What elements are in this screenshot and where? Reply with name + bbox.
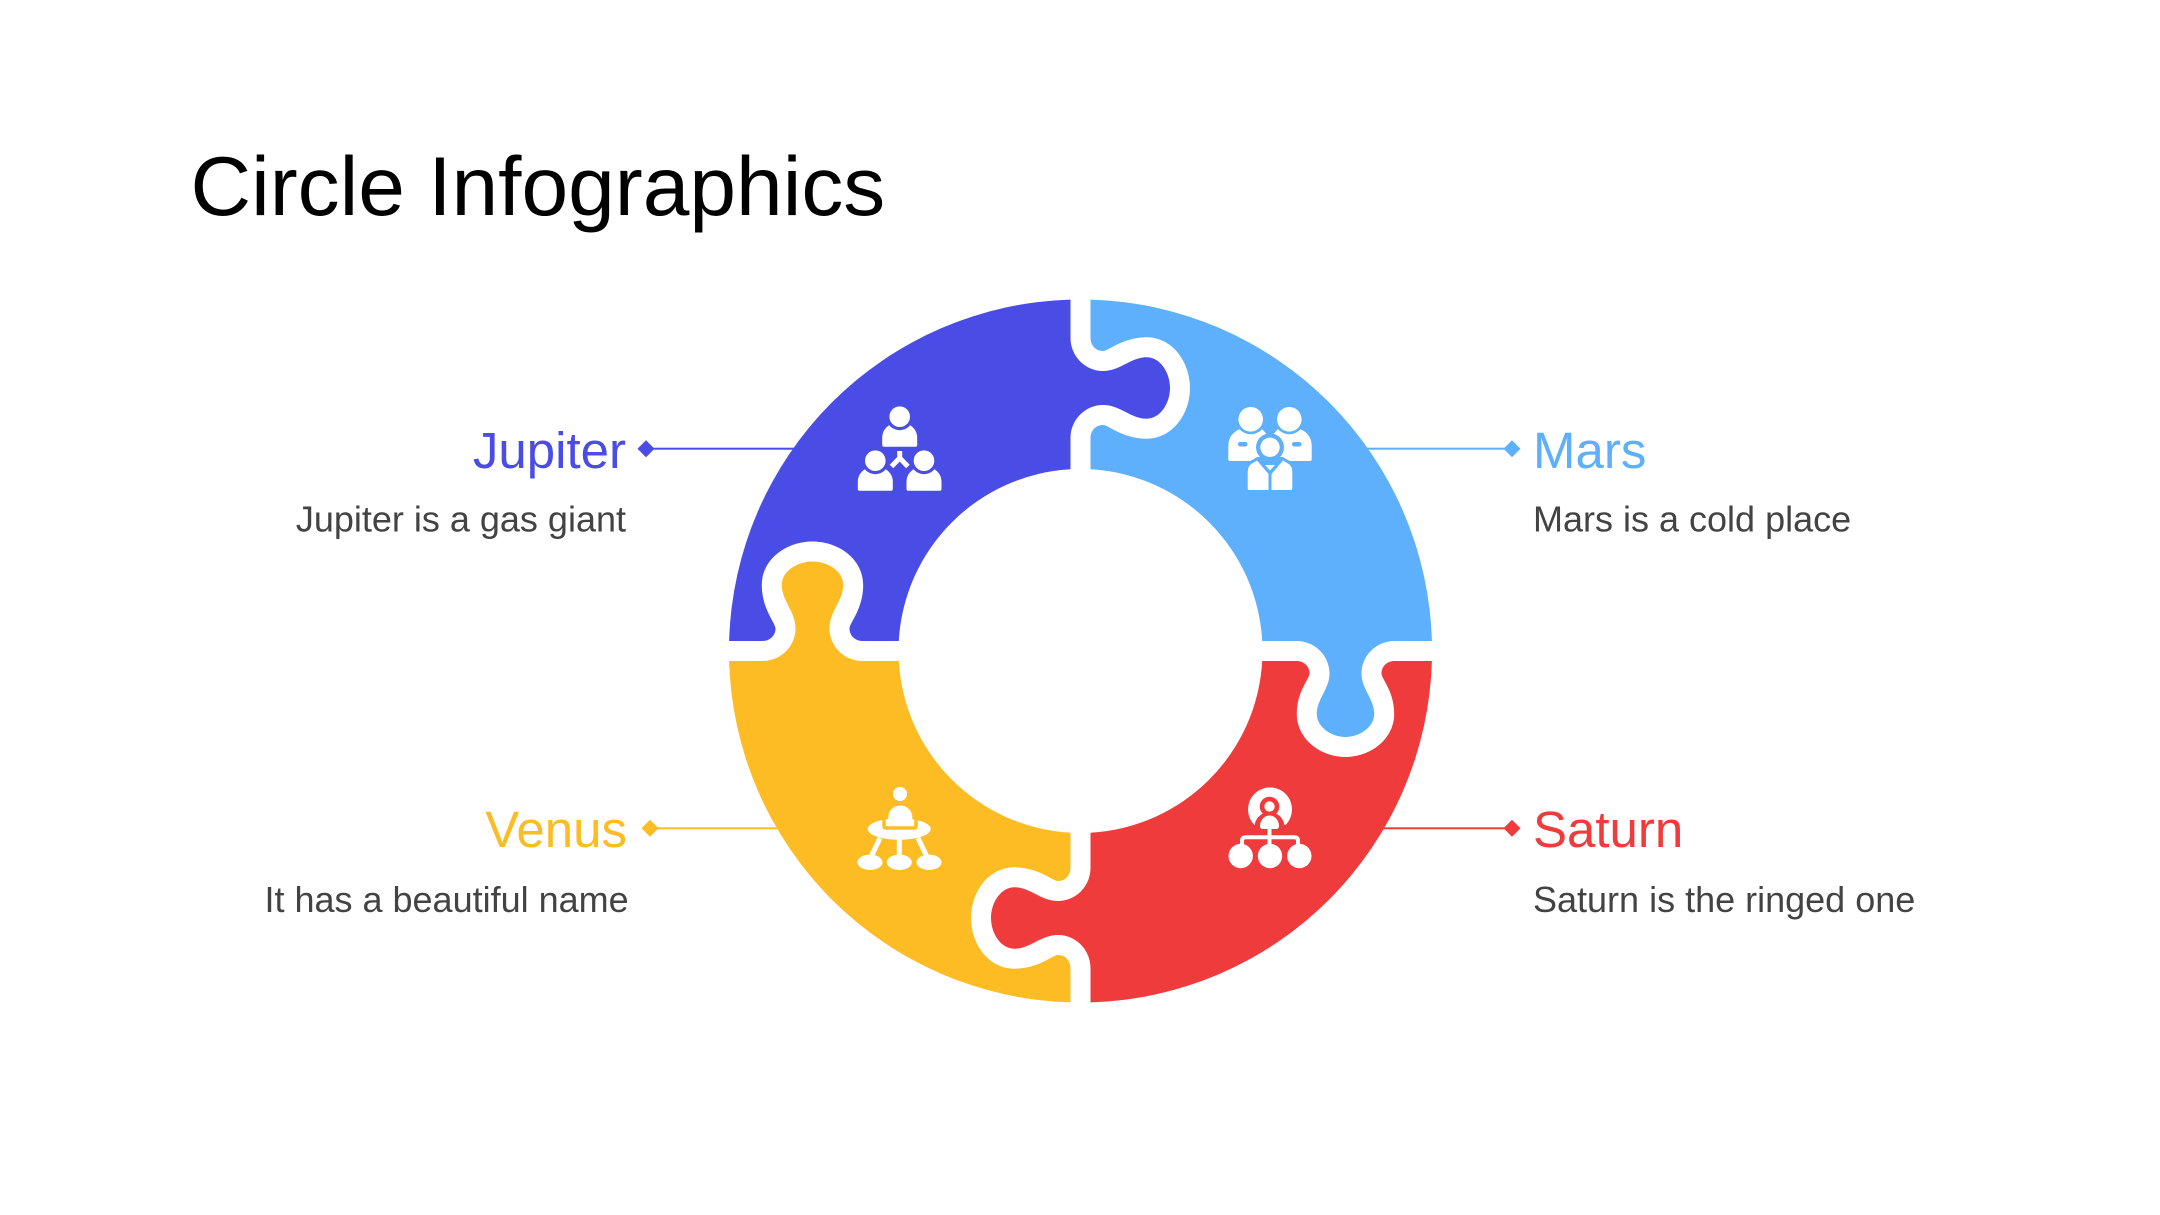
heading: Saturn: Saturn <box>1533 801 1683 858</box>
heading: Mars: Mars <box>1533 422 1646 479</box>
connector: Venus <box>642 820 792 837</box>
text: Venus description: It has a beautiful name <box>264 879 629 920</box>
connector: Saturn <box>1370 820 1520 837</box>
text: Mars description: Mars is a cold place <box>1533 498 1851 540</box>
puzzle piece: Mars <box>1090 300 1432 737</box>
callout: Venus <box>264 801 792 920</box>
heading: Venus: Venus <box>485 801 627 858</box>
heading: Jupiter: Jupiter <box>473 422 626 479</box>
connector: Mars <box>1360 440 1520 457</box>
callout: Jupiter <box>296 422 810 540</box>
icon: meeting table (Venus) <box>858 787 942 870</box>
icon: three people (Mars) <box>1228 404 1312 490</box>
text: Saturn description: Saturn is the ringed one <box>1533 879 1915 920</box>
icon: org chart (Saturn) <box>1228 787 1312 868</box>
puzzle piece: Jupiter <box>729 300 1170 641</box>
connector: Jupiter <box>638 440 810 457</box>
callout: Saturn <box>1370 801 1915 920</box>
text: Jupiter description: Jupiter is a gas giant <box>296 498 626 540</box>
puzzle piece: Saturn <box>991 661 1432 1002</box>
title: Circle Infographics <box>190 139 885 233</box>
icon: team hierarchy (Jupiter) <box>858 403 942 491</box>
puzzle piece: Venus <box>729 562 1070 1002</box>
callout: Mars <box>1360 422 1851 540</box>
